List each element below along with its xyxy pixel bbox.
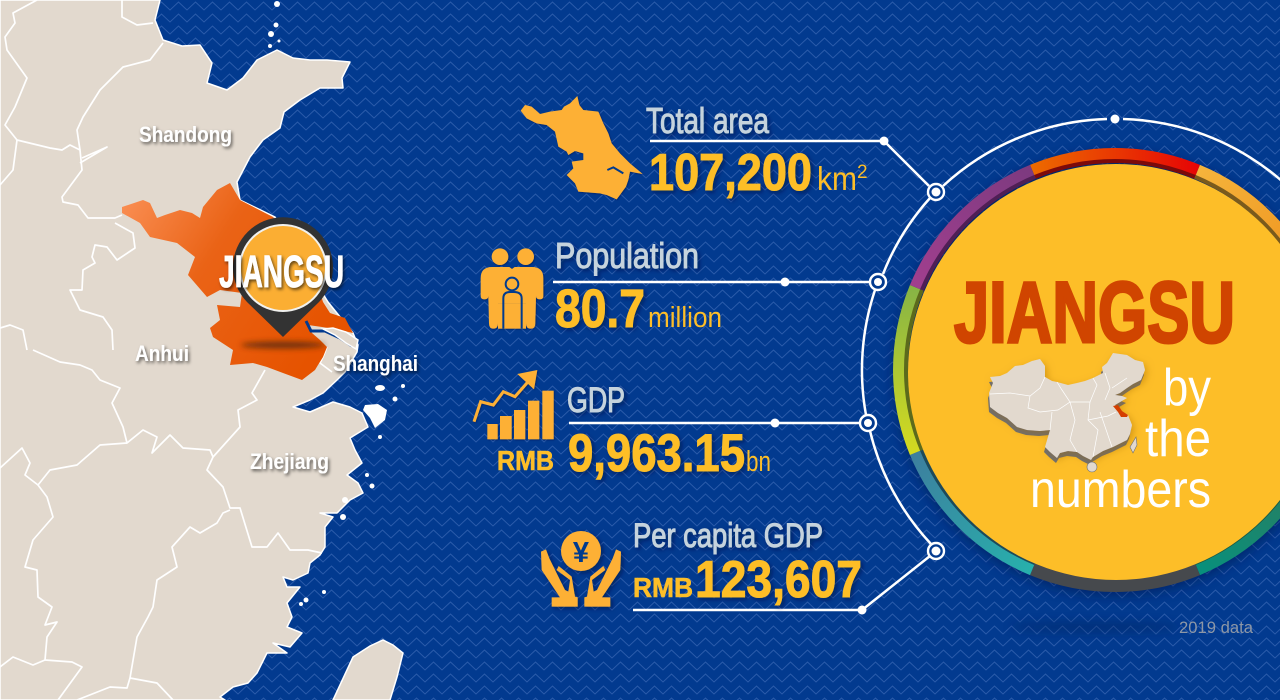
icon: family [481, 248, 543, 329]
pin label: JIANGSU [219, 246, 344, 297]
land mass [0, 0, 368, 700]
location pin [219, 217, 344, 348]
icon: Jiangsu silhouette [521, 96, 643, 199]
by the numbers [1030, 359, 1211, 519]
icon: hands holding yuan coin: ¥ [573, 537, 589, 569]
map label: Anhui: Anhui [135, 341, 189, 366]
stat: per capita GDP [541, 517, 862, 609]
main circle [893, 152, 1280, 596]
data year note: 2019 data [1179, 618, 1254, 637]
orbit nodes [770, 114, 1120, 614]
icon: hands holding yuan coin [541, 531, 621, 607]
stat: GDP: RMB [497, 445, 554, 476]
stat: total area: km [817, 160, 857, 197]
stat: population: 80.7 [555, 279, 645, 339]
stat: population: million [648, 302, 722, 334]
map of eastern China [0, 0, 403, 700]
stat: GDP [474, 370, 771, 483]
stat: GDP: 9,963.15 [568, 424, 745, 483]
ground shadow under circle [1010, 622, 1180, 632]
inner dark ring shadow [906, 161, 1280, 563]
Yangtze estuary and Chongming island [306, 321, 358, 349]
ring segments [900, 155, 1280, 585]
stat: per capita GDP: RMB [633, 572, 693, 603]
by the numbers: numbers [1030, 461, 1211, 519]
stat: per capita GDP: 123,607 [695, 551, 862, 609]
map label: Zhejiang: Zhejiang [250, 449, 329, 474]
stat: population [481, 235, 722, 339]
Jiangsu province highlight [122, 183, 353, 380]
outer orbit and connectors [553, 119, 1280, 610]
Taiwan [333, 640, 403, 700]
Jiangsu on mini map [1113, 405, 1128, 417]
province borders [0, 0, 332, 700]
icon: rising bar chart [474, 370, 554, 439]
stat: total area: 107,200 [649, 144, 812, 202]
by the numbers: the [1145, 410, 1211, 468]
stat: total area: 2 [857, 162, 868, 183]
stat: GDP: GDP [567, 381, 625, 420]
islands off Zhejiang and Shandong coasts [268, 1, 405, 606]
map label: Shandong: Shandong [139, 122, 232, 147]
stat: total area [521, 96, 868, 202]
Taiwan and Hainan [1130, 437, 1137, 453]
map label: Shanghai: Shanghai [333, 351, 418, 376]
stat: per capita GDP: Per capita GDP [633, 517, 823, 555]
stat: GDP: bn [746, 446, 771, 478]
stat: total area: Total area [646, 100, 770, 141]
by the numbers: by [1163, 359, 1211, 417]
stat: population: Population [555, 235, 699, 276]
mini China map [988, 353, 1145, 472]
